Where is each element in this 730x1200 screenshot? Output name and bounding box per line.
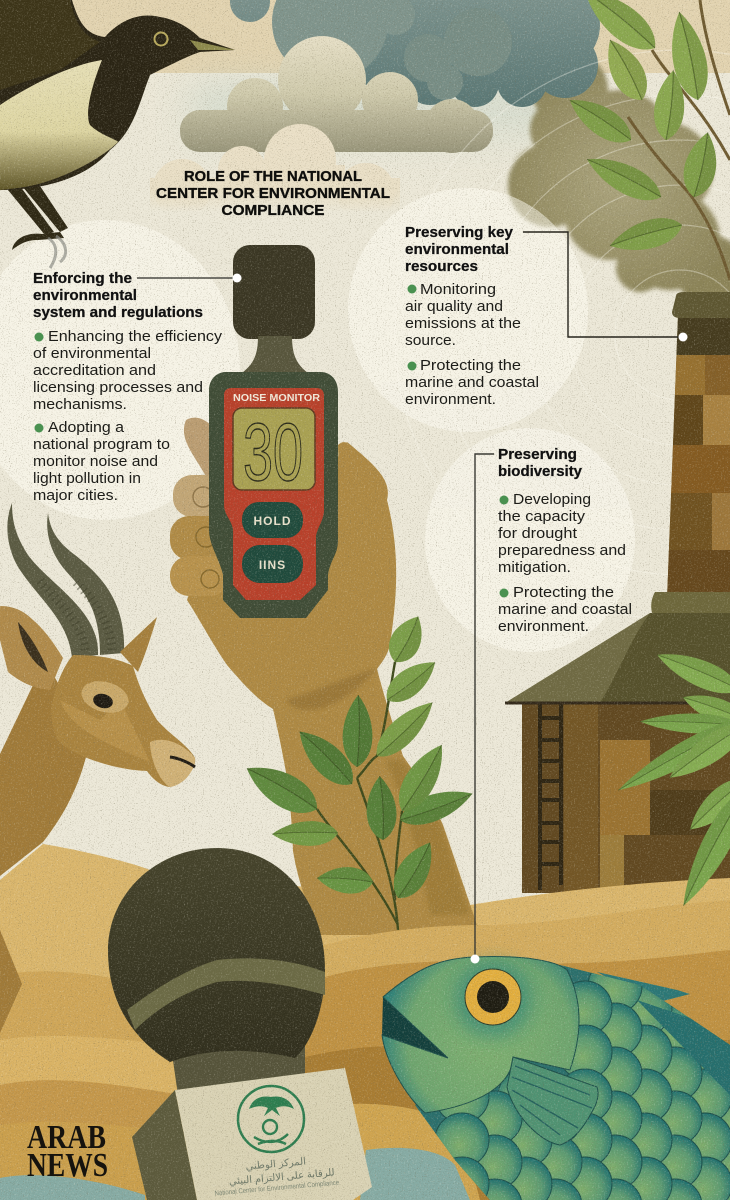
bullet: marine and coastal	[405, 358, 539, 408]
arab news logo: ARAB	[27, 1119, 106, 1156]
english name: National Center for Environmental Compliance	[214, 1180, 340, 1197]
magpie bird	[0, 0, 235, 268]
bullet: noise program: Adopting a	[48, 420, 125, 436]
microphone head	[108, 848, 325, 1062]
olive sprig over arm	[239, 610, 477, 930]
fish dorsal fin	[597, 972, 690, 1003]
fish pectoral fin	[507, 1057, 598, 1145]
bullet: accreditation	[33, 329, 223, 413]
fish eye	[465, 969, 521, 1025]
meter neck	[238, 336, 312, 376]
fish	[382, 957, 730, 1200]
bullet: marine and coastal: Protecting the	[420, 358, 521, 374]
microphone	[108, 848, 325, 1095]
bullet: accreditation: of environmental	[33, 346, 151, 362]
palm leaves, right edge	[613, 643, 730, 912]
heading: key resources: Preserving key	[405, 225, 513, 241]
gazelle	[0, 503, 195, 1033]
heading: enforcing: Enforcing the	[33, 271, 132, 287]
bullet: drought: for drought	[498, 526, 577, 542]
meter body	[209, 372, 338, 618]
heading: biodiversity: Preserving	[498, 447, 577, 463]
microphone neck	[170, 1040, 305, 1095]
thumb over device edge	[338, 442, 376, 520]
microphone band	[127, 958, 325, 1030]
fish cheek shading	[455, 962, 531, 1038]
bullet: accreditation: Enhancing the efficiency	[48, 329, 223, 345]
text block: preserving key environmental resources	[405, 225, 539, 408]
title	[156, 169, 390, 219]
bullet: drought: mitigation.	[498, 560, 571, 576]
bullet: accreditation: mechanisms.	[33, 397, 127, 413]
bullet: air quality: air quality and	[405, 299, 503, 315]
heading: key resources: environmental	[405, 242, 509, 258]
bullet: noise program: monitor noise and	[33, 454, 158, 470]
bullet: drought: Developing	[513, 492, 591, 508]
bullet: marine protection	[498, 585, 632, 635]
ins button: IINS	[259, 558, 286, 572]
bullet: accreditation: accreditation and	[33, 363, 156, 379]
heading: enforcing	[33, 271, 203, 321]
label: noise monitor: NOISE MONITOR	[233, 392, 320, 404]
heading: enforcing: environmental	[33, 288, 137, 304]
cloud behind title	[150, 124, 400, 221]
fish mouth	[382, 997, 448, 1058]
hold button	[242, 502, 303, 538]
text block: enforcing the environmental system	[33, 271, 223, 504]
bullet: marine and coastal: environment.	[405, 392, 496, 408]
bullet: accreditation: licensing processes and	[33, 380, 203, 396]
bullet: drought: preparedness and	[498, 543, 626, 559]
bullet: marine and coastal: marine and coastal	[405, 375, 539, 391]
arabic name second line: للرقابة على الالتزام البيئي	[228, 1167, 335, 1188]
bullet: air quality: Monitoring	[420, 282, 496, 298]
bullet: noise program: light pollution in	[33, 471, 141, 487]
lcd reading: 30	[243, 407, 303, 498]
bullet: noise program: major cities.	[33, 488, 118, 504]
box side	[132, 1090, 197, 1200]
bullet: noise program	[33, 420, 170, 504]
smoke from chimney	[508, 52, 730, 305]
heading: biodiversity	[498, 447, 582, 480]
desert dunes, back layer	[0, 844, 730, 1200]
soft highlight blobs behind text	[0, 188, 635, 652]
sound wave arcs from chimney	[395, 50, 730, 620]
heading: enforcing: system and regulations	[33, 305, 203, 321]
fish scales	[410, 959, 730, 1200]
branded box	[132, 1068, 372, 1200]
heading: biodiversity: biodiversity	[498, 464, 582, 480]
bullet: marine protection: marine and coastal	[498, 602, 632, 618]
gazelle foreleg	[0, 930, 22, 1033]
bullet: marine protection: Protecting the	[513, 585, 614, 601]
ncec logo	[238, 1086, 304, 1152]
meter microphone head	[233, 245, 315, 339]
hand fingers	[170, 418, 230, 596]
noise monitor device	[209, 245, 338, 618]
connector lines and dots	[137, 232, 688, 964]
box front	[175, 1068, 372, 1200]
water pools	[0, 1148, 470, 1200]
arab news logo: NEWS	[27, 1147, 108, 1184]
text block: preserving biodiversity	[498, 447, 632, 635]
fish head	[382, 957, 579, 1113]
lcd screen	[233, 408, 315, 490]
bullet: noise program: national program to	[33, 437, 170, 453]
arabic name: المركز الوطني	[245, 1156, 306, 1173]
hand and arm holding meter	[187, 442, 480, 935]
bullet: air quality	[405, 282, 521, 349]
brick building with roof and ladder	[505, 592, 730, 893]
meter red panel	[224, 388, 324, 600]
bullet: air quality: source.	[405, 333, 456, 349]
chimney	[667, 292, 730, 592]
bullet: marine protection: environment.	[498, 619, 589, 635]
bullet: drought	[498, 492, 626, 576]
title: CENTER FOR ENVIRONMENTAL	[156, 186, 390, 202]
bullet: drought: the capacity	[498, 509, 586, 525]
olive branch, top right	[562, 0, 730, 280]
heading: key resources	[405, 225, 513, 275]
gazelle ears	[0, 606, 157, 690]
gazelle horns	[7, 503, 124, 658]
beige cloud	[180, 36, 493, 153]
arab news logo	[27, 1119, 108, 1184]
desert dunes, front layer	[250, 900, 730, 1200]
title: COMPLIANCE	[222, 203, 325, 219]
hold button: HOLD	[254, 514, 292, 528]
bullet: air quality: emissions at the	[405, 316, 521, 332]
title: ROLE OF THE NATIONAL	[184, 169, 362, 185]
dark storm cloud	[230, 0, 600, 107]
gazelle neck	[0, 660, 90, 876]
ins button	[242, 545, 303, 583]
gazelle head	[51, 655, 195, 787]
fish back stripe	[637, 1000, 730, 1095]
heading: key resources: resources	[405, 259, 478, 275]
